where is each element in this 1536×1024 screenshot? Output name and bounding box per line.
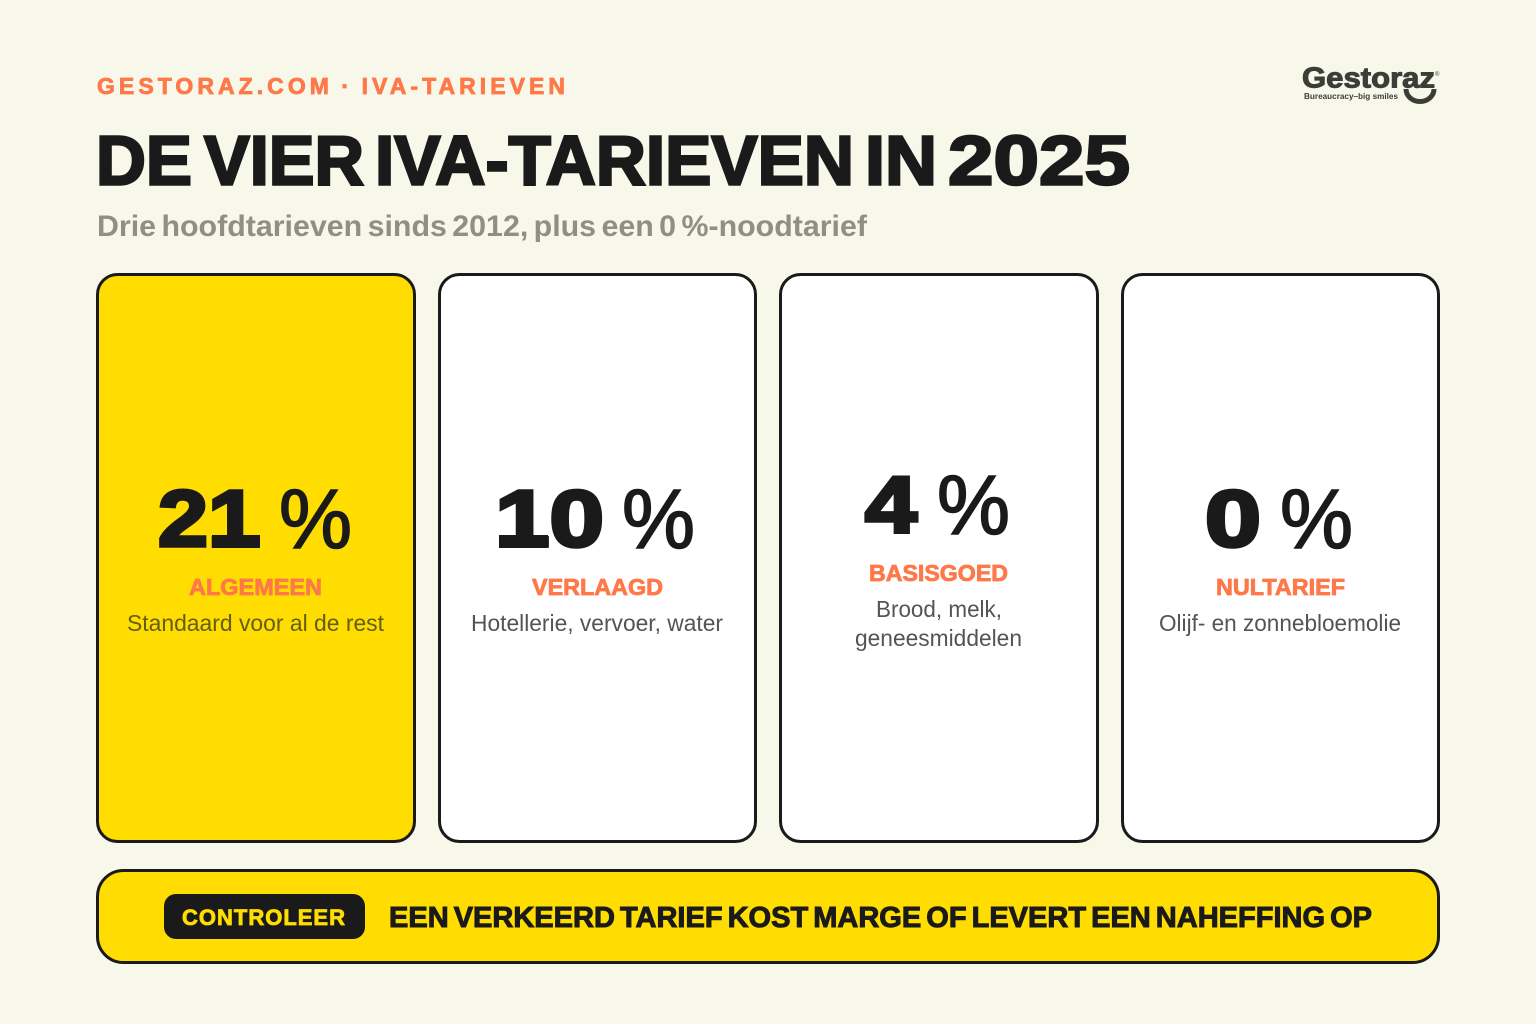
rate 4: 4: [865, 460, 918, 549]
label: NULTARIEF: [1216, 574, 1345, 600]
rate 21: 21: [158, 474, 258, 563]
title: IVA-TARIEVEN: [375, 122, 854, 200]
percent sign: %: [937, 458, 1010, 552]
logo: Bureaucracy–big smiles: [1304, 92, 1399, 101]
panel: algemeen: [98, 274, 414, 842]
title: VIER: [204, 122, 364, 200]
title: [96, 122, 1130, 200]
description: [855, 596, 1022, 651]
label: VERLAAGD: [532, 574, 663, 600]
description: geneesmiddelen: [855, 625, 1022, 651]
percent sign: %: [622, 472, 695, 566]
title: DE: [96, 122, 192, 200]
rate 0: 0: [1205, 474, 1261, 563]
callout text: EEN VERKEERD TARIEF KOST MARGE OF LEVERT EEN NAHEFFING OP: [389, 902, 1372, 934]
icon: smile: [1406, 89, 1434, 102]
label: BASISGOED: [869, 560, 1008, 586]
percent sign: %: [1280, 472, 1353, 566]
description: Brood, melk,: [876, 596, 1002, 622]
description: Hotellerie, vervoer, water: [471, 610, 723, 636]
title: IN: [865, 122, 937, 200]
label: ALGEMEEN: [189, 574, 322, 600]
percent sign: %: [279, 472, 352, 566]
panel: nultarief: [1122, 274, 1438, 842]
badge: [164, 894, 365, 939]
panel: basisgoed: [780, 274, 1098, 842]
eyebrow: GESTORAZ.COM · IVA-TARIEVEN: [97, 73, 565, 99]
description: Standaard voor al de rest: [127, 610, 385, 636]
rate 10: 10: [495, 474, 604, 563]
logo: Gestoraz: [1302, 62, 1435, 94]
callout bar: [98, 870, 1438, 962]
title: 2025: [948, 122, 1130, 200]
panel: verlaagd: [440, 274, 756, 842]
logo: ®: [1435, 71, 1440, 78]
description: Olijf- en zonnebloemolie: [1159, 610, 1401, 636]
badge: CONTROLEER: [182, 905, 345, 930]
subtitle: Drie hoofdtarieven sinds 2012, plus een 0 %-noodtarief: [97, 210, 868, 243]
